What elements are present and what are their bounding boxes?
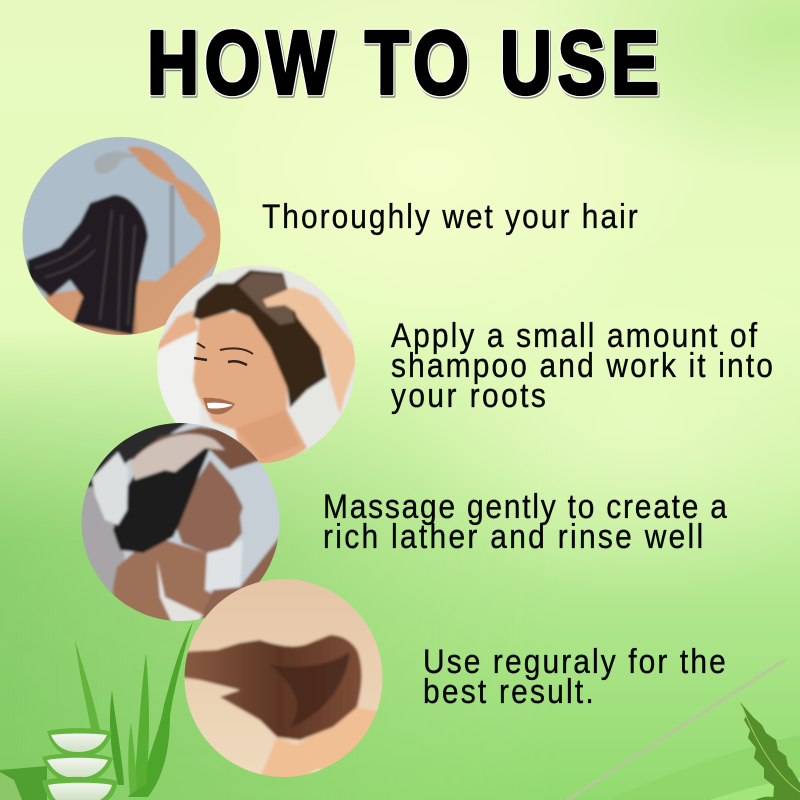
- flowing brown hair: [180, 635, 362, 740]
- face and neck: [193, 312, 307, 470]
- shoulders: [260, 706, 377, 777]
- icon: aloe vera plant: [0, 622, 193, 800]
- short brown hair: [193, 270, 327, 408]
- step 3 text: rich lather and rinse well: [323, 517, 703, 555]
- dark lathered hair: [113, 448, 210, 553]
- step 1 text: Thoroughly wet your hair: [262, 197, 638, 235]
- dark and grey backdrop: [88, 423, 190, 489]
- shower hose: [170, 185, 174, 270]
- foam and hand: [92, 452, 128, 525]
- bather skin: [45, 147, 230, 345]
- icon: neem leaf: [740, 702, 800, 800]
- background wave and stalk: [567, 660, 800, 800]
- step 3 text: [323, 487, 727, 555]
- wet black hair: [27, 195, 148, 335]
- arm around top: [130, 427, 262, 470]
- shower head: [94, 152, 143, 174]
- photo: windblown healthy hair: [184, 579, 382, 777]
- step 4 text: Use reguraly for the: [423, 642, 726, 680]
- photo: massaging lather: [82, 423, 280, 621]
- step 2 text: shampoo and work it into: [391, 346, 773, 384]
- photo: applying shampoo to roots: [157, 266, 355, 464]
- step 2 text: [391, 316, 773, 414]
- eyes, brows and smile: [197, 343, 253, 354]
- step 4 text: [423, 642, 726, 710]
- photo: wetting hair under shower: [22, 137, 220, 335]
- step 2 text: your roots: [391, 376, 546, 414]
- shoulders and neck: [112, 538, 213, 620]
- step 4 text: best result.: [423, 672, 594, 710]
- step 3 text: Massage gently to create a: [323, 487, 727, 525]
- step 2 text: Apply a small amount of: [391, 316, 757, 354]
- title: HOW TO USE: [147, 13, 659, 113]
- face: [175, 460, 243, 553]
- hand on hair: [262, 288, 296, 313]
- raised arms: [158, 309, 200, 352]
- aloe slices: [47, 728, 112, 757]
